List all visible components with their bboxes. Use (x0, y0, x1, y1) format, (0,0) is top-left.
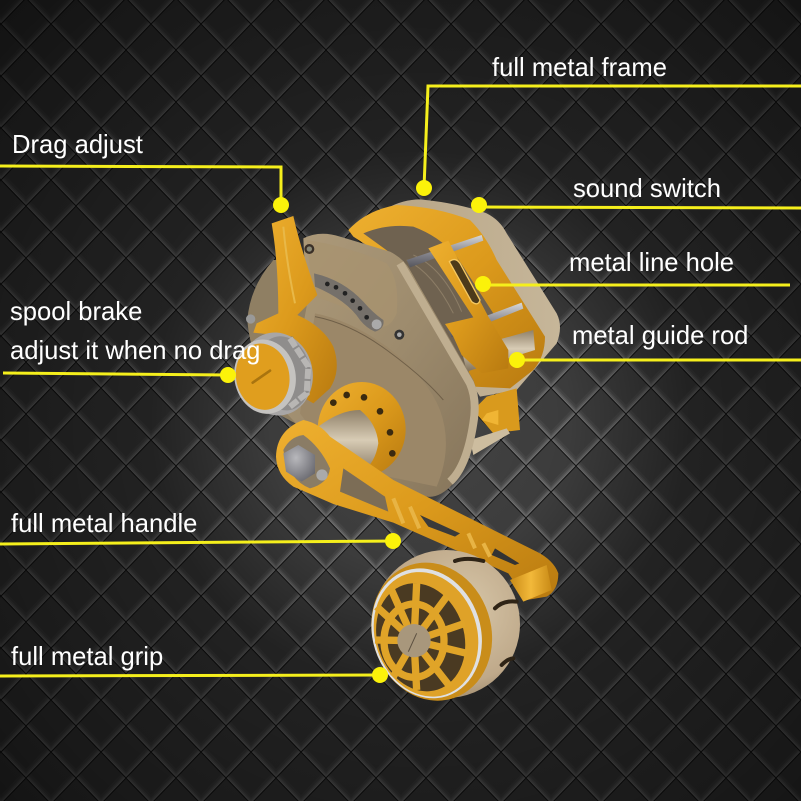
spool (363, 226, 493, 380)
illustration: fishing reel (228, 199, 560, 717)
callout: drag adjust (0, 131, 289, 213)
callout: full metal handle (0, 510, 401, 549)
callout: sound switch: sound switch (573, 175, 721, 203)
callout: metal guide rod: metal guide rod (572, 322, 748, 350)
line guide (428, 241, 508, 373)
brake knob (234, 327, 319, 421)
back plate (387, 199, 560, 397)
callout: full metal frame: full metal frame (492, 54, 667, 82)
callout: sound switch (471, 175, 801, 213)
main side plate (287, 234, 478, 497)
brake slot plate (314, 273, 384, 332)
gear ring (318, 382, 406, 477)
callout: drag adjust: Drag adjust (12, 131, 143, 159)
left disc (247, 260, 340, 433)
callout: metal guide rod (509, 322, 801, 368)
callout: spool brake: adjust it when no drag (10, 337, 260, 365)
grip knob (354, 547, 520, 717)
handle arm (276, 420, 558, 602)
screws (246, 244, 404, 340)
callout: spool brake (3, 298, 260, 383)
callout: metal line hole (475, 249, 790, 292)
reel body (228, 199, 560, 497)
lower foot bracket (473, 388, 520, 433)
callout: full metal grip: full metal grip (11, 643, 163, 671)
handle eye and bolt (283, 435, 330, 488)
rollers and rods (462, 330, 535, 372)
callout: spool brake: spool brake (10, 298, 142, 326)
hub (313, 410, 378, 477)
handle and grip (276, 420, 558, 717)
callout: metal line hole: metal line hole (569, 249, 734, 277)
callout: full metal handle: full metal handle (11, 510, 197, 538)
callout: full metal frame (416, 54, 801, 196)
gold frame (348, 205, 545, 388)
callout: full metal grip (0, 643, 388, 683)
drag lever (253, 216, 337, 403)
